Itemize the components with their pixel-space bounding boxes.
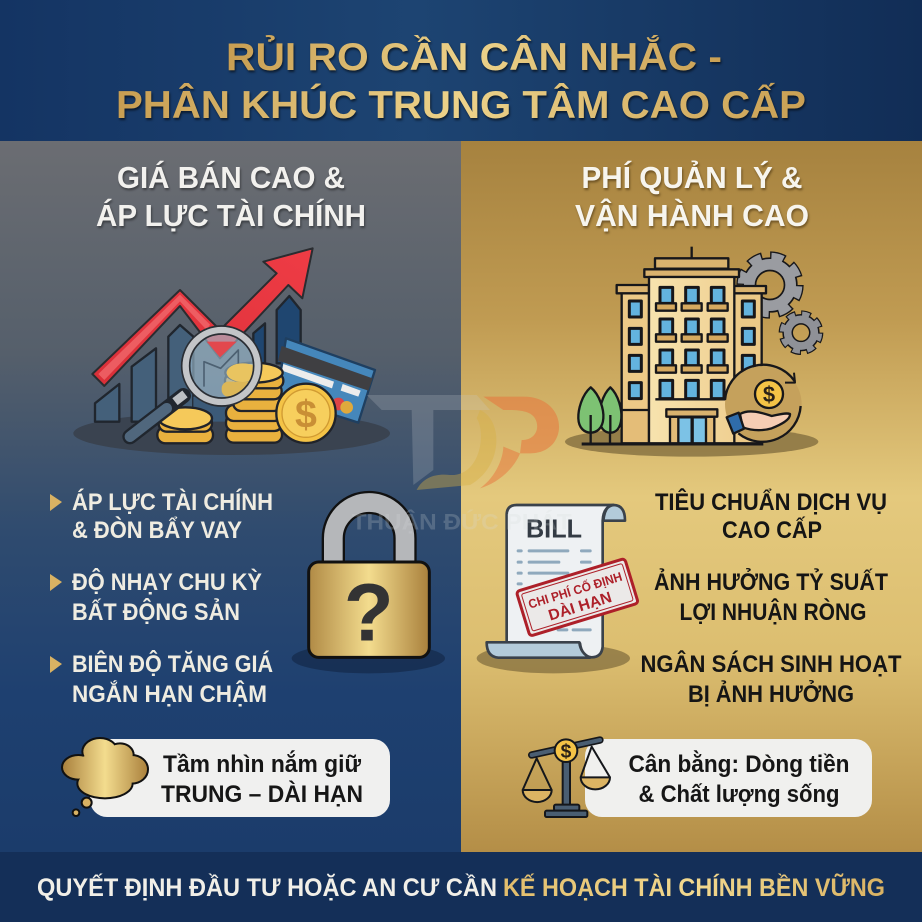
header background xyxy=(0,0,922,141)
bullet: slow price growth xyxy=(50,650,273,708)
credit card xyxy=(277,338,375,423)
left heading xyxy=(96,160,366,233)
left bullet list xyxy=(50,488,273,708)
footer bar xyxy=(0,852,922,922)
big dollar coin xyxy=(276,384,336,443)
right text list xyxy=(640,488,902,708)
icon: bill with stamp xyxy=(477,505,638,673)
item: living budget: NGÂN SÁCH SINH HOẠT xyxy=(640,650,902,678)
item: premium service: TIÊU CHUẨN DỊCH VỤ xyxy=(655,488,887,516)
trees xyxy=(578,387,621,444)
bullet: cycle sensitivity: BẤT ĐỘNG SẢN xyxy=(72,597,240,626)
callout: holding horizon: Tầm nhìn nắm giữ xyxy=(163,750,362,778)
title: PHÂN KHÚC TRUNG TÂM CAO CẤP xyxy=(116,83,806,127)
watermark text: THUẬN ĐỨC PHÁT xyxy=(352,509,572,534)
callout: holding horizon xyxy=(63,739,390,817)
item: net yield impact xyxy=(654,567,888,626)
item: net yield impact: ẢNH HƯỞNG TỶ SUẤT xyxy=(654,567,888,596)
gear small xyxy=(782,314,820,351)
icon: padlock with question mark xyxy=(292,502,445,673)
callout: balance: Cân bằng: Dòng tiền xyxy=(628,750,850,778)
right heading: VẬN HÀNH CAO xyxy=(575,197,809,233)
bullet: financial pressure: & ĐÒN BẨY VAY xyxy=(72,516,242,544)
coin stack left xyxy=(157,407,213,443)
panel: right, management and operating fees xyxy=(461,141,922,852)
item: net yield impact: LỢI NHUẬN RÒNG xyxy=(680,598,866,626)
left heading: ÁP LỰC TÀI CHÍNH xyxy=(96,198,366,233)
callout: holding horizon: TRUNG – DÀI HẠN xyxy=(161,780,363,808)
callout: balance xyxy=(523,739,872,817)
panel: left, price and financial pressure xyxy=(0,141,461,852)
magnifier xyxy=(130,326,262,437)
big dollar coin: $ xyxy=(295,392,317,436)
left heading: GIÁ BÁN CAO & xyxy=(117,160,345,195)
right heading xyxy=(575,160,809,233)
coin stack centre xyxy=(225,363,283,443)
money cycle with hand xyxy=(725,365,802,443)
item: living budget xyxy=(640,650,902,708)
bullet: cycle sensitivity: ĐỘ NHẠY CHU KỲ xyxy=(72,568,262,596)
centre overlays: watermark, lock and bill xyxy=(292,395,638,673)
item: premium service xyxy=(655,488,887,544)
icon: thought cloud xyxy=(63,739,147,816)
bullet: cycle sensitivity xyxy=(50,568,262,626)
money cycle with hand: $ xyxy=(763,382,775,407)
footer highlight: KẾ HOẠCH TÀI CHÍNH BỀN VỮNG xyxy=(503,872,885,902)
bullet: slow price growth: BIÊN ĐỘ TĂNG GIÁ xyxy=(72,650,273,678)
icon: chart, magnifier, coins and credit card xyxy=(73,248,390,455)
footer message: QUYẾT ĐỊNH ĐẦU TƯ HOẶC AN CƯ CẦN xyxy=(37,873,497,902)
callout: balance: & Chất lượng sống xyxy=(638,781,840,808)
gear large xyxy=(741,256,799,314)
balconies xyxy=(656,303,728,373)
title: RỦI RO CẦN CÂN NHẮC - xyxy=(226,35,722,79)
item: living budget: BỊ ẢNH HƯỞNG xyxy=(688,679,854,708)
bullet: slow price growth: NGẮN HẠN CHẬM xyxy=(72,680,267,708)
bullet: financial pressure: ÁP LỰC TÀI CHÍNH xyxy=(72,488,273,516)
item: premium service: CAO CẤP xyxy=(722,516,822,544)
entrance xyxy=(666,409,717,443)
icon: bill with stamp: BILL xyxy=(526,513,582,543)
icon: balance scale xyxy=(523,739,610,817)
stamp: DÀI HẠN xyxy=(546,589,614,624)
icon: balance scale: $ xyxy=(561,742,572,763)
bullet: financial pressure xyxy=(50,488,273,544)
stamp: CHI PHÍ CỐ ĐỊNH xyxy=(526,569,624,612)
stamp xyxy=(516,558,638,636)
watermark logo xyxy=(367,395,559,490)
icon: padlock with question mark: ? xyxy=(344,568,394,659)
icon: building, gears, trees and hand with coin xyxy=(565,247,820,457)
windows xyxy=(629,287,754,399)
right heading: PHÍ QUẢN LÝ & xyxy=(582,160,802,195)
title xyxy=(116,35,806,127)
